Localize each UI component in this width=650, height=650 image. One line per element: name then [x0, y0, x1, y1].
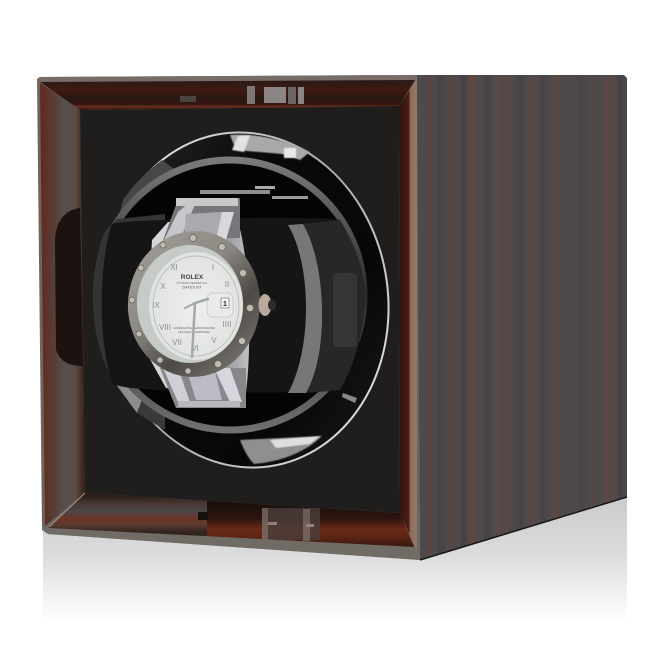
- certification text: SUPERLATIVE CHRONOMETER: [173, 326, 215, 330]
- roman numerals: VI: [191, 344, 199, 353]
- brand text: ROLEX: [181, 274, 204, 281]
- bracelet top: [163, 198, 240, 240]
- case lugs: [146, 222, 249, 392]
- roman numerals: V: [211, 336, 217, 345]
- bezel: [121, 225, 267, 383]
- winder drum: [81, 113, 411, 487]
- bottom bevel: [48, 493, 414, 547]
- bottom bevel notch: [198, 512, 208, 520]
- roman numerals: VII: [172, 338, 182, 347]
- cushion right section: [303, 220, 365, 393]
- ring bracelet reflection bottom: [240, 436, 322, 464]
- product photo: single watch winder box: [37, 75, 628, 606]
- dial: [149, 252, 243, 360]
- roman numerals: IX: [152, 301, 160, 310]
- watch: [121, 198, 276, 408]
- roman numerals: X: [160, 282, 166, 291]
- ring glare top-left: [118, 160, 184, 220]
- roman numerals: XI: [170, 263, 178, 272]
- ring bracelet reflection top: [230, 135, 310, 160]
- bottom left mitre highlight: [49, 493, 85, 527]
- watch: 1: [223, 301, 227, 308]
- ring glare bottom-left: [115, 383, 147, 413]
- roman numerals: II: [225, 280, 229, 289]
- floor reflection shadow: [43, 495, 627, 622]
- recessed felt panel: [80, 106, 400, 513]
- bezel diamonds: [129, 234, 254, 374]
- watch: OFFICIALLY CERTIFIED: [178, 330, 210, 334]
- right bevel: [399, 79, 417, 551]
- crown: [258, 294, 276, 316]
- minute track: [153, 256, 239, 356]
- front frame silhouette: [37, 75, 420, 560]
- cushion pad: [333, 273, 357, 347]
- left bevel: [40, 83, 85, 526]
- bracelet bottom: [160, 368, 246, 408]
- cushion: [102, 218, 365, 392]
- inner collar: [96, 160, 364, 430]
- ring small highlight: [342, 393, 357, 403]
- top bevel watch reflection: [180, 86, 304, 104]
- back bracelet links: [200, 186, 308, 199]
- roman numerals: VIII: [159, 323, 171, 332]
- side panel bottom edge: [420, 497, 627, 560]
- datejust text: DATEJUST: [182, 286, 202, 290]
- bottom bevel watch reflection: [262, 508, 320, 541]
- top edge highlight: [37, 75, 417, 84]
- bottom bevel dark reflection: [207, 500, 420, 550]
- top bevel: [40, 80, 415, 110]
- bottom metal edge: [42, 526, 420, 560]
- roman numerals: I: [212, 263, 214, 272]
- cushion left arc: [93, 214, 165, 388]
- right side panel with wood veneer: [414, 70, 630, 565]
- outer ring rim: [81, 113, 411, 487]
- model text: OYSTER PERPETUAL: [176, 281, 208, 285]
- roman numerals: IIII: [223, 320, 231, 329]
- cushion grey band: [288, 224, 322, 393]
- glass ring: [137, 245, 243, 363]
- left bevel dark reflection: [55, 208, 83, 366]
- date window: [207, 293, 233, 317]
- roman numerals: [152, 263, 231, 353]
- glossy black ring: [83, 115, 409, 485]
- ring glare bottom-left dark: [137, 387, 165, 430]
- watch hands: [185, 299, 208, 357]
